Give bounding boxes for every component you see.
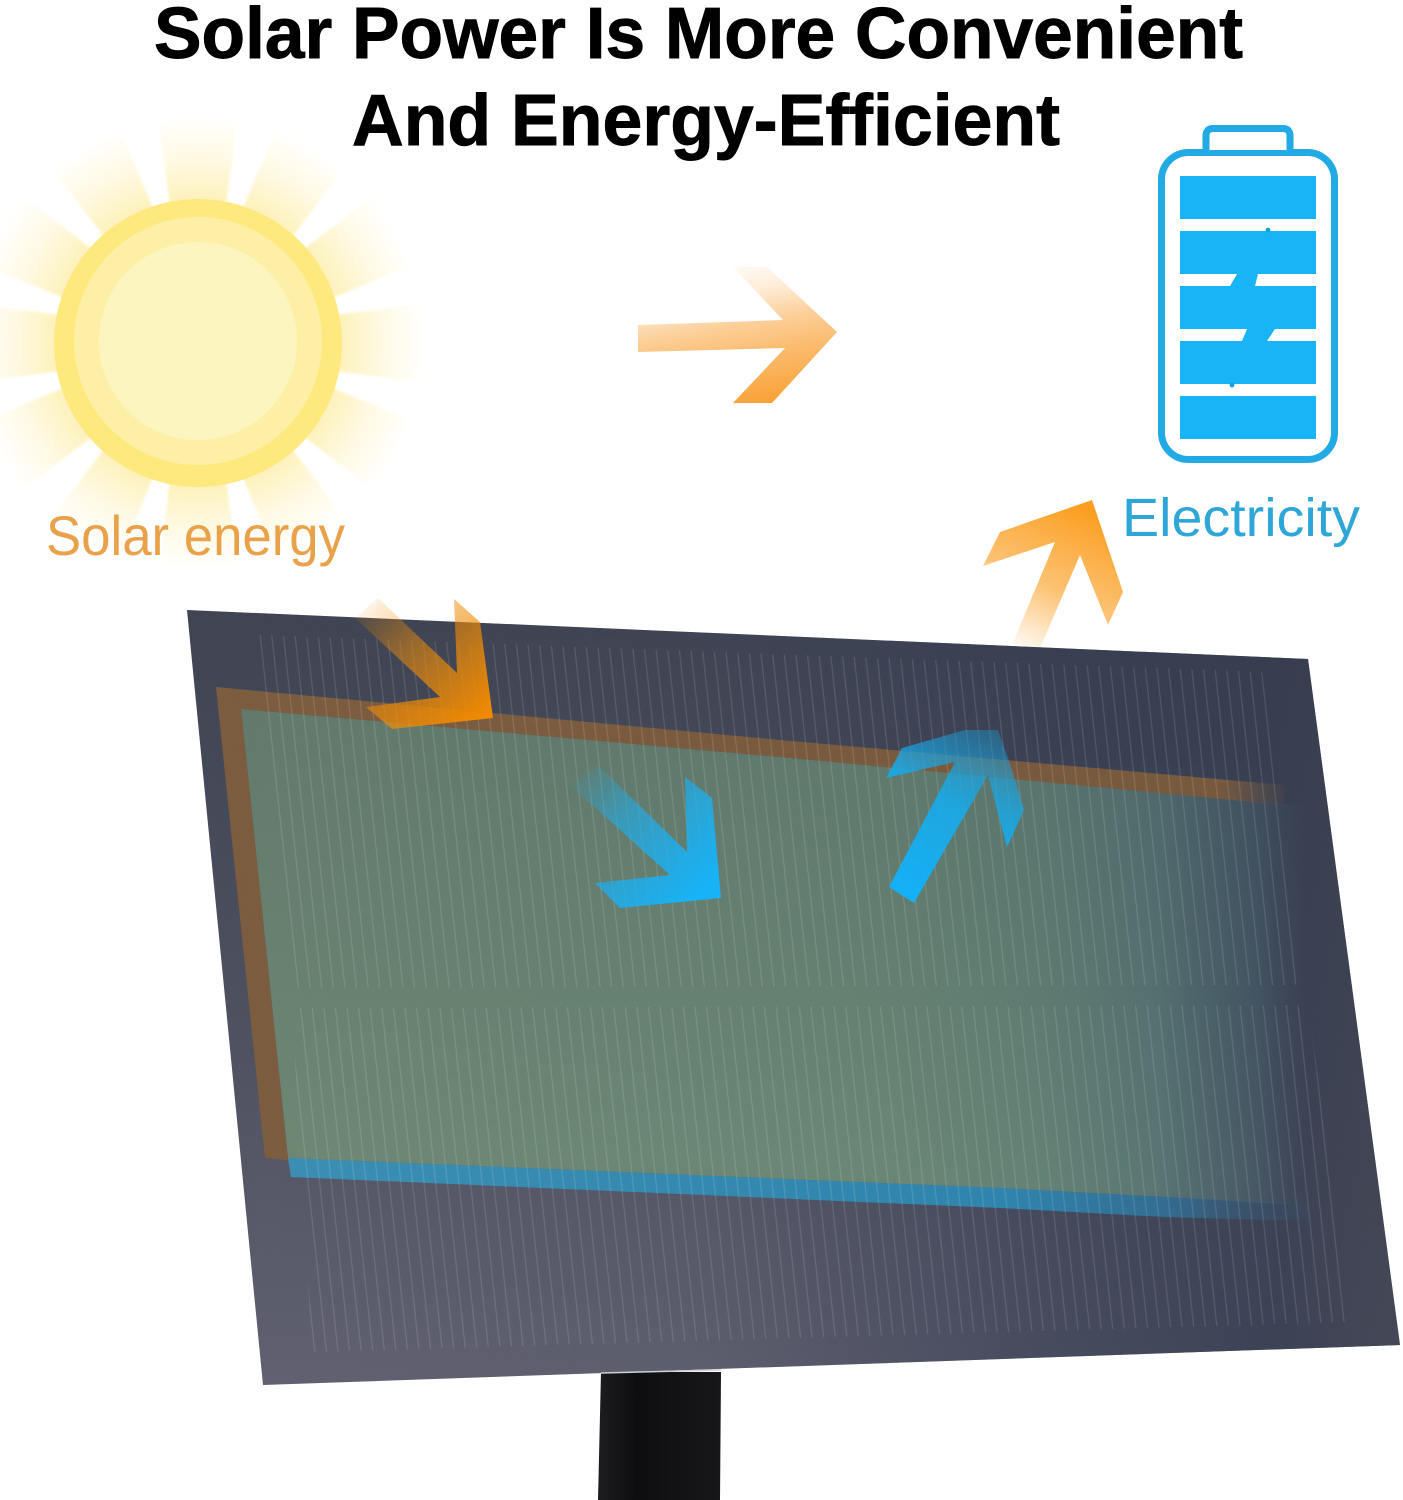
blue band: current output xyxy=(288,1158,1310,1221)
surface grain xyxy=(414,760,1313,1226)
orange band: light entering xyxy=(216,687,1285,1160)
panel-to-pole highlight xyxy=(601,1370,721,1373)
sun disc xyxy=(54,199,342,487)
absorbing zone overlay xyxy=(241,709,1312,1206)
battery cap xyxy=(1206,128,1290,150)
label: solar energy: Solar energy xyxy=(46,504,345,567)
battery outline xyxy=(1162,152,1334,460)
arrow: blue into cell xyxy=(570,765,721,908)
cell grid lines xyxy=(255,635,1352,1352)
title xyxy=(154,0,1243,161)
title: And Energy-Efficient xyxy=(352,81,1060,161)
mounting pole xyxy=(598,1372,721,1500)
sun rays xyxy=(0,108,433,578)
arrow: sun to battery xyxy=(638,267,837,403)
icon: battery xyxy=(1162,128,1334,460)
arrow: panel to electricity xyxy=(983,500,1123,648)
panel body xyxy=(187,610,1400,1385)
panel: solar panel xyxy=(187,610,1400,1385)
label: electricity: Electricity xyxy=(1122,488,1360,548)
battery charge bars with lightning bolt xyxy=(1180,176,1316,439)
arrow: blue out of cell xyxy=(886,730,1024,903)
icon: sun xyxy=(0,108,433,578)
arrow: orange into panel xyxy=(355,598,493,729)
